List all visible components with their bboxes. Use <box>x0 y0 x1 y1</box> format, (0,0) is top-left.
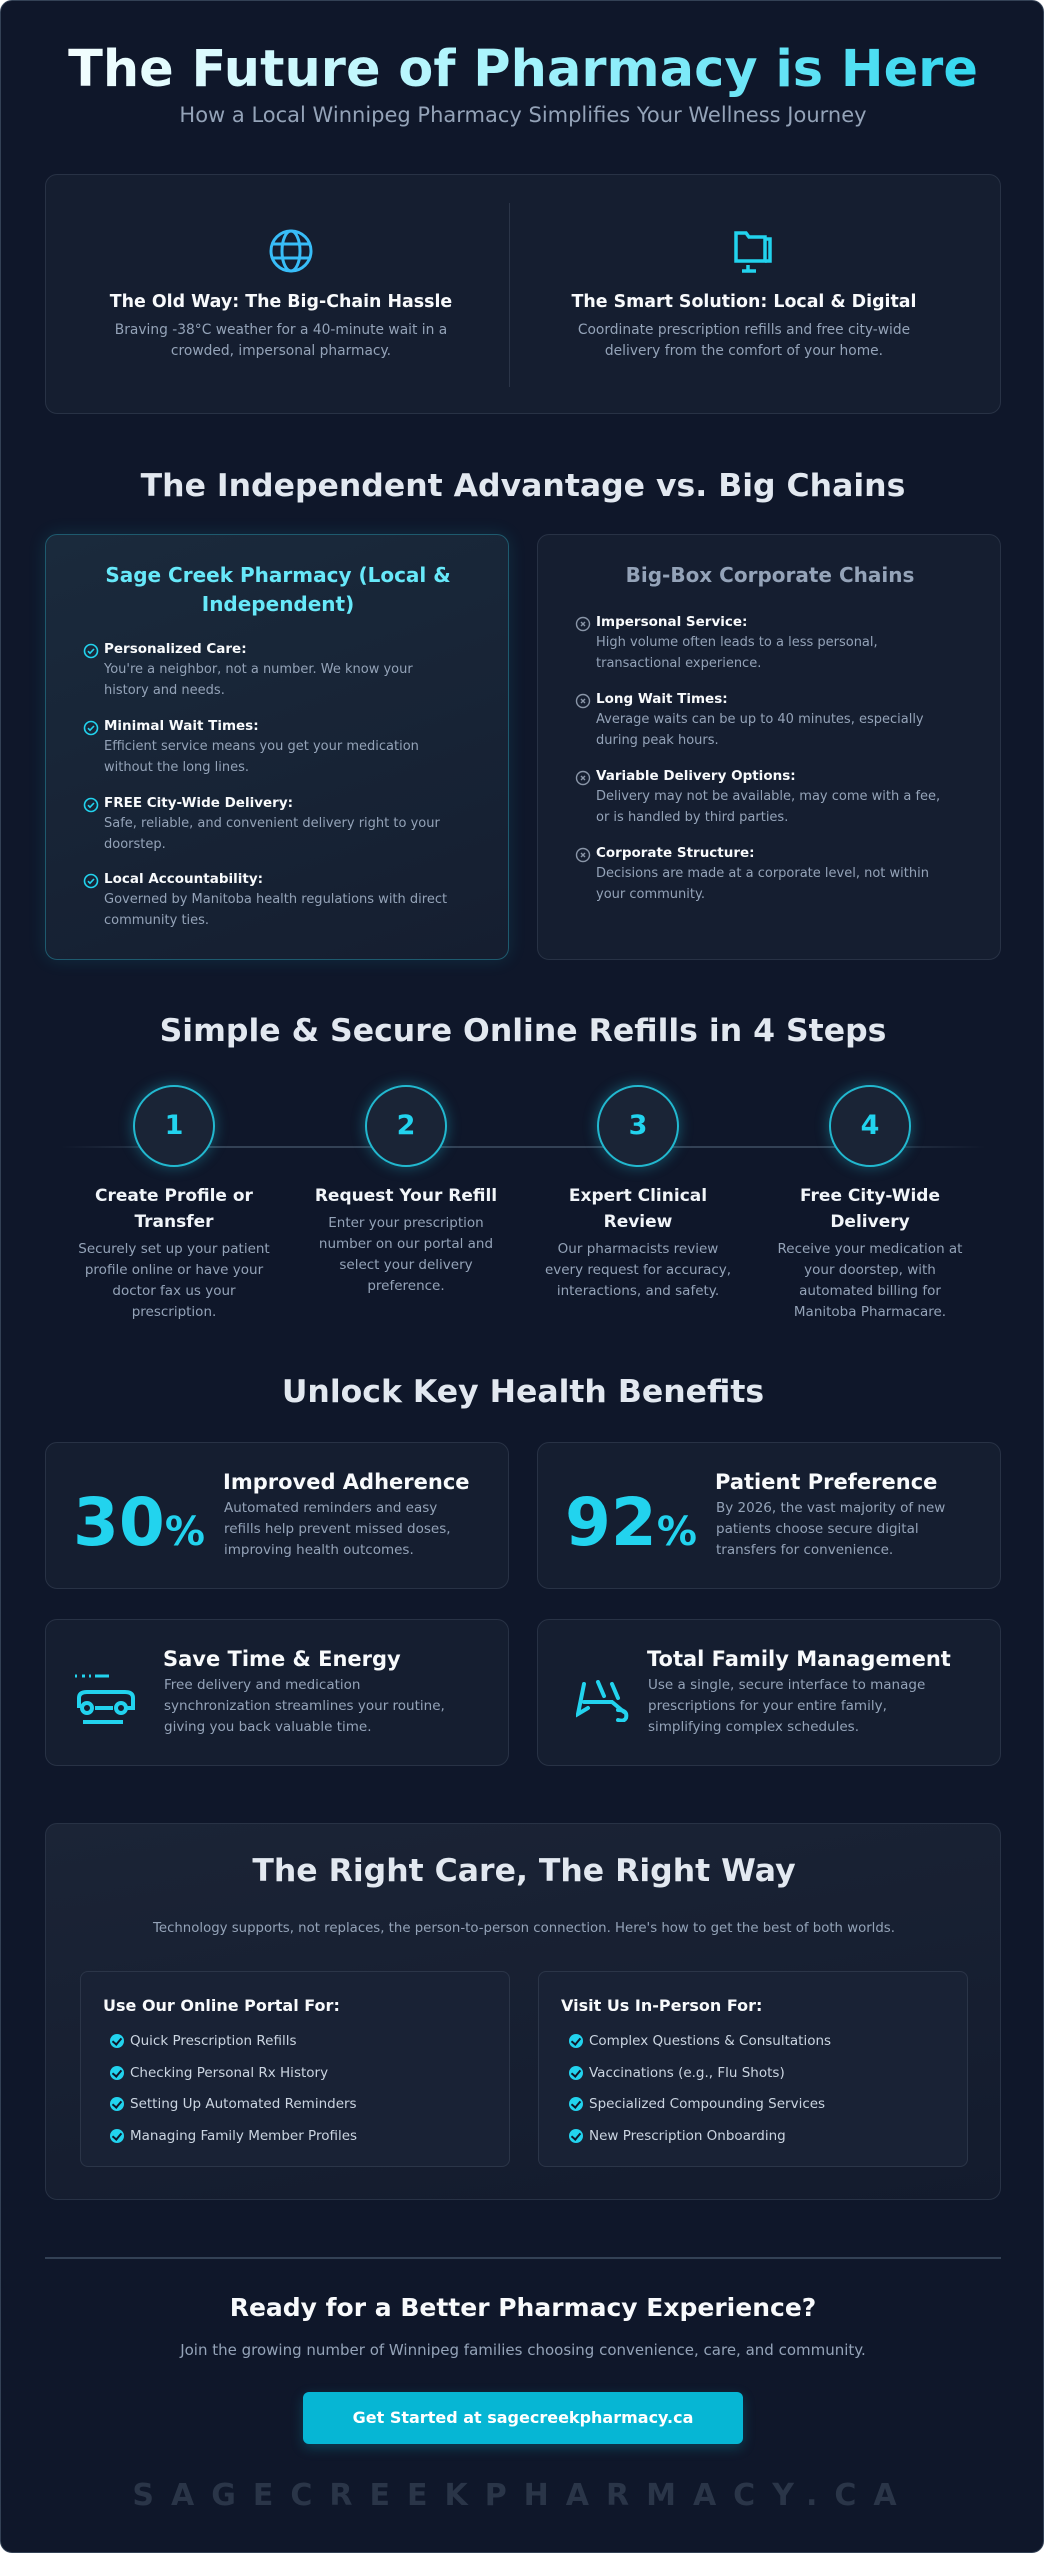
item: delivery: doorstep. <box>104 837 166 852</box>
panel: big box <box>537 534 1001 960</box>
watermark: SAGECREEKPHARMACY.CA <box>132 2478 914 2513</box>
box: in-person: Specialized Compounding Services <box>589 2096 825 2112</box>
step 4 <box>778 1078 962 1320</box>
text: smart solution <box>572 292 916 359</box>
step 3: Expert Clinical <box>569 1186 707 1206</box>
step 3: 3 <box>629 1110 647 1141</box>
box: in-person: Complex Questions & Consultations <box>589 2033 831 2049</box>
item: impersonal: transactional experience. <box>596 656 761 671</box>
item: delivery <box>84 795 440 852</box>
step 3: Our pharmacists review every request for accuracy, interactions, and safety. <box>545 1241 731 1299</box>
heading: Big-Box Corporate Chains <box>626 563 914 587</box>
card: preference: By 2026, the vast majority of new <box>716 1500 945 1516</box>
panel: right care <box>45 1823 1001 2200</box>
text: smart solution: delivery from the comfort of your home. <box>605 343 883 359</box>
item: wait: Efficient service means you get your medication <box>104 739 419 754</box>
text: old way <box>110 292 452 359</box>
item: impersonal: High volume often leads to a less personal, <box>596 635 878 650</box>
card: save time: Save Time & Energy <box>163 1647 401 1671</box>
item: personalized: Personalized Care: <box>104 641 247 657</box>
heading: Independent) <box>202 592 354 616</box>
item: delivery: Safe, reliable, and convenient delivery right to your <box>104 816 440 831</box>
item: accountability <box>84 871 447 928</box>
card: family: simplifying complex schedules. <box>648 1719 859 1735</box>
text: old way: crowded, impersonal pharmacy. <box>171 343 391 359</box>
box: online portal: Checking Personal Rx History <box>130 2065 328 2081</box>
step 1: 1 <box>165 1110 183 1141</box>
card: save time: synchronization streamlines your routine, <box>164 1698 445 1714</box>
heading: The Right Care, The Right Way <box>252 1853 796 1889</box>
item: corporate: Corporate Structure: <box>596 845 755 861</box>
item: corporate <box>576 845 929 902</box>
panel: old way vs smart solution <box>45 174 1001 414</box>
subtitle: How a Local Winnipeg Pharmacy Simplifies Your Wellness Journey <box>179 103 867 127</box>
panel: sage creek <box>45 534 509 960</box>
card: adherence: Improved Adherence <box>223 1470 470 1494</box>
step 4: Delivery <box>830 1212 910 1232</box>
box: in-person: Visit Us In-Person For: <box>561 1996 762 2015</box>
text: smart solution: The Smart Solution: Local & Digital <box>572 292 916 312</box>
step 4: 4 <box>861 1110 879 1141</box>
item: personalized: You're a neighbor, not a number. We know your <box>104 662 413 677</box>
card: preference: Patient Preference <box>715 1470 937 1494</box>
box: online portal <box>80 1971 510 2167</box>
item: variable delivery: Delivery may not be available, may come with a fee, <box>596 789 940 804</box>
step 1: Create Profile or <box>95 1186 253 1206</box>
heading <box>105 563 451 616</box>
card: preference <box>537 1442 1001 1589</box>
box: online portal: Use Our Online Portal For: <box>103 1996 340 2015</box>
CTA button: Get Started at sagecreekpharmacy.ca <box>353 2408 693 2427</box>
step 3 <box>545 1078 731 1299</box>
box: in-person: Vaccinations (e.g., Flu Shots) <box>589 2065 785 2081</box>
box: online portal: Setting Up Automated Reminders <box>130 2096 357 2112</box>
step 1 <box>78 1078 270 1320</box>
item: long wait: Average waits can be up to 40 minutes, especially <box>596 712 924 727</box>
card: adherence: improving health outcomes. <box>224 1542 414 1558</box>
text: old way: The Old Way: The Big-Chain Hassle <box>110 292 452 312</box>
step 2: Enter your prescription number on our portal and select your delivery preference. <box>319 1215 493 1294</box>
item: corporate: your community. <box>596 887 705 902</box>
icon: globe <box>270 230 312 272</box>
card: adherence <box>45 1442 509 1589</box>
box: online portal: Managing Family Member Profiles <box>130 2128 357 2144</box>
card: family: Total Family Management <box>647 1647 951 1671</box>
item: long wait: Long Wait Times: <box>596 691 728 707</box>
card: adherence: 30% <box>73 1484 205 1561</box>
card: save time: giving you back valuable time. <box>164 1719 372 1735</box>
item: long wait: during peak hours. <box>596 733 719 748</box>
box: in-person: New Prescription Onboarding <box>589 2128 786 2144</box>
text: smart solution: Coordinate prescription refills and free city-wide <box>578 322 910 338</box>
item: accountability: community ties. <box>104 913 209 928</box>
subtext: Technology supports, not replaces, the person-to-person connection. Here's how to get the best of both worlds. <box>153 1921 895 1936</box>
step 3: Review <box>604 1212 672 1232</box>
item: variable delivery <box>576 768 940 825</box>
card: family: prescriptions for your entire family, <box>648 1698 887 1714</box>
CTA button <box>303 2392 743 2444</box>
item: accountability: Local Accountability: <box>104 871 263 887</box>
icon: devices <box>734 231 772 273</box>
item: accountability: Governed by Manitoba health regulations with direct <box>104 892 447 907</box>
step 4: Free City-Wide <box>800 1186 940 1206</box>
item: wait <box>84 718 419 775</box>
step 4: Receive your medication at your doorstep, with automated billing for Manitoba Pharmacare. <box>778 1241 962 1320</box>
step 2 <box>315 1078 497 1294</box>
CTA subtext: Join the growing number of Winnipeg families choosing convenience, care, and community. <box>180 2341 866 2359</box>
item: personalized: history and needs. <box>104 683 225 698</box>
item: impersonal: Impersonal Service: <box>596 614 747 630</box>
steps <box>78 1078 962 1320</box>
heading: steps: Simple & Secure Online Refills in 4 Steps <box>160 1013 886 1049</box>
card: family: Use a single, secure interface to manage <box>648 1677 925 1693</box>
card: family <box>537 1619 1001 1766</box>
step 2: Request Your Refill <box>315 1186 497 1206</box>
title: The Future of Pharmacy is Here <box>68 40 978 99</box>
card: preference: 92% <box>565 1484 697 1561</box>
icon: family arrows <box>576 1680 628 1722</box>
step 1: Securely set up your patient profile online or have your doctor fax us your prescription. <box>78 1241 270 1320</box>
card: adherence: refills help prevent missed doses, <box>224 1521 451 1537</box>
box: in-person <box>538 1971 968 2167</box>
item: wait: without the long lines. <box>104 760 249 775</box>
item: personalized <box>84 641 413 698</box>
heading: Sage Creek Pharmacy (Local & <box>105 563 451 587</box>
heading: independent advantage: The Independent Advantage vs. Big Chains <box>141 468 905 504</box>
box: online portal: Quick Prescription Refills <box>130 2033 297 2049</box>
item: wait: Minimal Wait Times: <box>104 718 259 734</box>
step 2: 2 <box>397 1110 415 1141</box>
item: variable delivery: Variable Delivery Options: <box>596 768 796 784</box>
card: save time <box>45 1619 509 1766</box>
CTA heading: Ready for a Better Pharmacy Experience? <box>230 2293 816 2322</box>
item: corporate: Decisions are made at a corporate level, not within <box>596 866 929 881</box>
card: preference: patients choose secure digital <box>716 1521 919 1537</box>
item: long wait <box>576 691 924 748</box>
icon: vehicle <box>75 1674 135 1724</box>
item: variable delivery: or is handled by third parties. <box>596 810 788 825</box>
card: save time: Free delivery and medication <box>164 1677 360 1693</box>
heading: benefits: Unlock Key Health Benefits <box>282 1374 764 1410</box>
item: delivery: FREE City-Wide Delivery: <box>104 795 293 811</box>
step 1: Transfer <box>134 1212 214 1232</box>
card: preference: transfers for convenience. <box>716 1542 893 1558</box>
item: impersonal <box>576 614 878 671</box>
card: adherence: Automated reminders and easy <box>224 1500 437 1516</box>
text: old way: Braving -38°C weather for a 40-minute wait in a <box>115 322 447 338</box>
